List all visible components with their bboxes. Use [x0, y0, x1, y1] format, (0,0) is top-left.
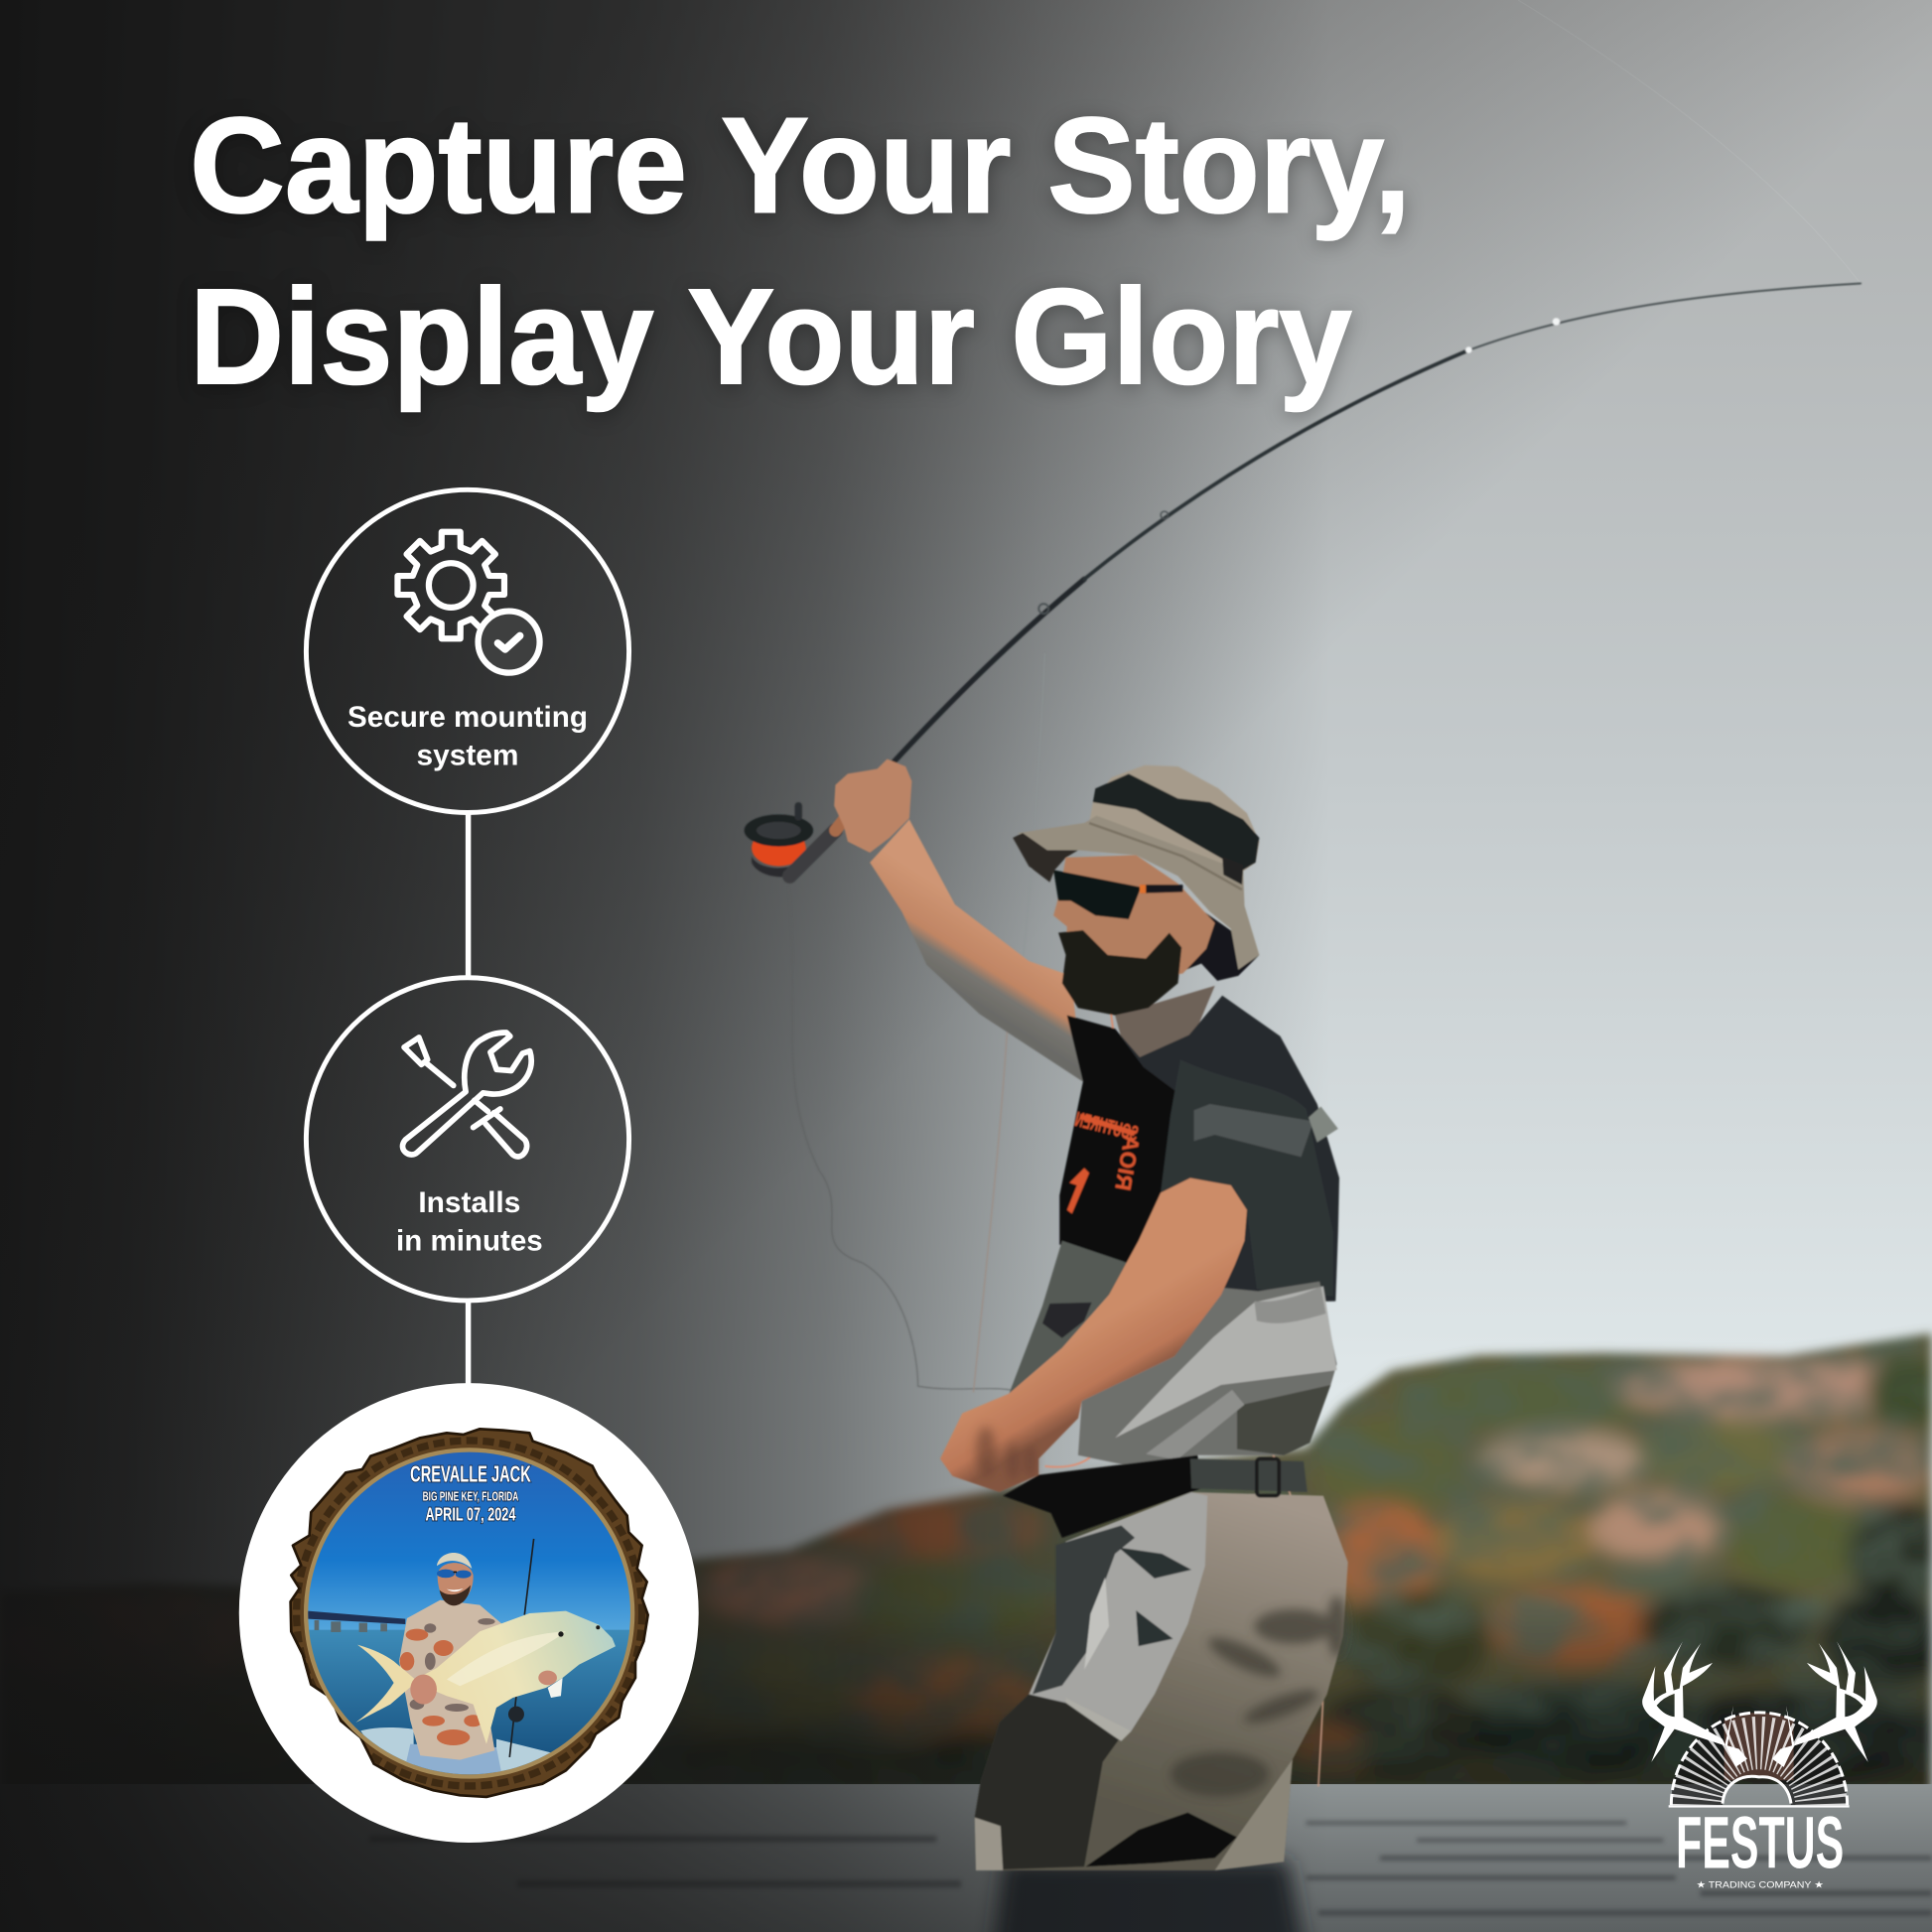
connector lines — [466, 813, 471, 1386]
beard — [1058, 930, 1181, 1016]
jeans — [407, 1743, 501, 1775]
fly reel — [745, 802, 813, 877]
rod grip — [790, 808, 853, 876]
product: wood slice with fishing photo — [291, 1429, 648, 1797]
wader patch — [1042, 1303, 1092, 1338]
neck — [1115, 986, 1215, 1059]
bridge — [308, 1611, 405, 1632]
fisherman — [745, 283, 1861, 1870]
icon: gear with check — [397, 532, 540, 673]
title: Capture Your Story, — [190, 88, 1411, 240]
title — [190, 88, 1411, 412]
sunglasses — [1053, 870, 1182, 919]
photo sky — [308, 1449, 632, 1635]
feature: secure mounting — [306, 489, 629, 812]
wader upper — [1009, 1241, 1135, 1394]
faint fly line in sky — [1518, 0, 1861, 283]
white product circle — [239, 1383, 699, 1843]
badge ring — [306, 489, 629, 812]
bark edge — [291, 1429, 648, 1797]
wader bib folded — [1078, 1282, 1337, 1471]
shirt graphic: SOUTHREN — [1072, 1108, 1141, 1146]
face — [1053, 855, 1215, 986]
icon: wrench and screwdriver — [403, 1033, 531, 1157]
raised hand — [834, 759, 911, 853]
feature: installs in minutes — [306, 978, 629, 1301]
wood slice emblem — [1668, 1711, 1850, 1868]
shirt graphic — [1067, 1108, 1145, 1213]
label: Secure mounting — [347, 701, 588, 734]
badge ring — [306, 978, 629, 1301]
rod — [509, 1539, 534, 1757]
hair — [1176, 897, 1259, 981]
photo caption — [410, 1461, 531, 1525]
jack fish — [355, 1611, 616, 1744]
arm strap — [1194, 1104, 1338, 1157]
bucket hat — [1013, 765, 1259, 970]
printed photo — [308, 1449, 632, 1780]
photo water — [308, 1630, 632, 1775]
raised arm — [870, 819, 1083, 1082]
boat — [360, 1727, 550, 1772]
tagline: ★ TRADING COMPANY ★ — [1696, 1880, 1824, 1890]
antlers — [1642, 1641, 1877, 1767]
fly line strands — [788, 653, 1324, 1787]
festus logo — [1642, 1641, 1877, 1890]
label — [347, 701, 588, 772]
water — [0, 1784, 1932, 1932]
label: Installs — [418, 1186, 520, 1219]
t-shirt — [1059, 996, 1339, 1304]
blurred hills — [0, 1330, 1932, 1799]
label — [396, 1186, 543, 1258]
photo caption: BIG PINE KEY, FLORIDA — [423, 1490, 518, 1504]
label: system — [416, 740, 518, 772]
title: Display Your Glory — [190, 260, 1352, 412]
photo caption: CREVALLE JACK — [410, 1461, 531, 1487]
wader legs — [975, 1492, 1348, 1870]
photo caption: APRIL 07, 2024 — [425, 1505, 515, 1525]
rod guides — [1465, 318, 1560, 353]
belt — [1003, 1455, 1308, 1538]
angler head — [437, 1553, 474, 1605]
label: in minutes — [396, 1225, 543, 1258]
fly rod — [890, 283, 1861, 766]
lower arm and fist — [940, 1177, 1247, 1492]
shirt graphic: RIOA — [1110, 1134, 1145, 1192]
camo shirt — [399, 1600, 503, 1760]
